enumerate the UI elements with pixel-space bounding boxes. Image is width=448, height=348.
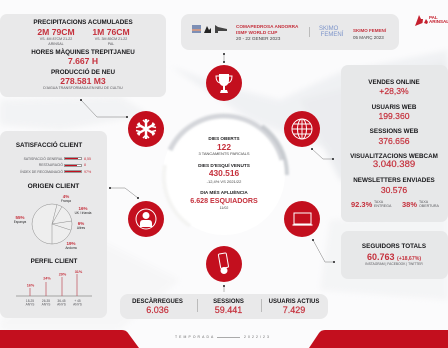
bar chart: perfil: 16% bbox=[27, 283, 35, 287]
label: SATISFACCIÓ GENERAL bbox=[24, 156, 63, 160]
bar chart: perfil: 31% bbox=[75, 270, 83, 274]
event: Skimo Femení bbox=[353, 28, 386, 40]
footer: temporada bbox=[175, 334, 271, 338]
value: 7.429 bbox=[283, 305, 305, 315]
event: Comapedrosa: 20 - 22 GENER 2023 bbox=[236, 36, 280, 40]
legend: Espanya: Espanya bbox=[14, 220, 26, 224]
value: seguidors: 60.763 (+18,67%) bbox=[367, 252, 421, 262]
note: comparació: -12,4% VS 2021/22 bbox=[207, 178, 241, 184]
legend: UK bbox=[74, 206, 92, 215]
icon: laptop bbox=[284, 201, 320, 237]
note: arinsal: ARINSAL bbox=[48, 42, 64, 46]
note: producció: D'AIGUA TRANSFORMADA EN NEU DE CULTIU bbox=[43, 86, 123, 90]
heading: producció: PRODUCCIÓ DE NEU bbox=[51, 69, 115, 76]
icon: snowflake bbox=[128, 111, 164, 147]
heading: precipitacions: PRECIPITACIONS ACUMULADES bbox=[33, 19, 133, 26]
heading: origen: ORIGEN CLIENT bbox=[28, 183, 79, 190]
rate: entrega bbox=[351, 200, 392, 209]
panel: seguidors bbox=[341, 231, 448, 279]
value: 430.516: 430.516 bbox=[209, 168, 239, 178]
icon: phone bbox=[206, 246, 242, 282]
value: 6.036 bbox=[146, 305, 169, 315]
value: producció: 278.581 M3 bbox=[60, 76, 106, 86]
legend: UK: 16% bbox=[78, 206, 88, 211]
icon: trophy bbox=[206, 65, 242, 101]
icon: globe bbox=[284, 111, 320, 147]
legend: Altres bbox=[76, 221, 85, 230]
value: sessions: 376.656 bbox=[378, 136, 410, 146]
logo: Skimo Femení: FEMENÍ bbox=[321, 32, 343, 38]
value: 2M 79CM: 2M 79CM bbox=[37, 27, 75, 37]
value: 8 bbox=[84, 163, 86, 167]
panel: app stats bbox=[120, 294, 328, 319]
note: data: 11/02 bbox=[220, 206, 228, 210]
heading: webcam: VISUALITZACIONS WEBCAM bbox=[350, 153, 438, 160]
central stats bbox=[190, 136, 258, 210]
value: webcam: 3.040.389 bbox=[373, 159, 415, 170]
value: vendes: +28,3% bbox=[379, 86, 409, 96]
legend: França: França bbox=[61, 199, 71, 203]
bar chart: perfil: ANYS bbox=[42, 302, 50, 306]
rate: obertura: TAXA bbox=[419, 200, 428, 204]
value: 122: 122 bbox=[217, 142, 231, 152]
logo: Skimo Femení bbox=[319, 26, 344, 38]
event: Skimo Femení: 05 MARÇ 2023 bbox=[353, 34, 384, 40]
value: newsletters: 30.576 bbox=[381, 185, 407, 195]
panel: events bbox=[181, 14, 399, 50]
logo: Skimo Femení: SKIMO bbox=[319, 26, 338, 32]
icon: person bbox=[128, 201, 164, 237]
note: pal: PAL bbox=[108, 42, 114, 46]
value: 1M 76CM: 1M 76CM bbox=[92, 27, 130, 37]
rate: entrega: ENTREGA bbox=[374, 204, 391, 208]
legend: Andorra bbox=[65, 241, 77, 250]
label: RESTAURACIÓ bbox=[39, 163, 63, 167]
satisfaction rows bbox=[20, 156, 92, 174]
pie chart bbox=[32, 204, 72, 244]
heading: hores màquines: HORES MÀQUINES TREPITJANEU bbox=[31, 49, 135, 56]
value: 8,55 bbox=[84, 156, 91, 160]
heading: DESCÀRREGUES bbox=[132, 299, 183, 305]
footer: right red shape bbox=[309, 330, 448, 348]
legend: França: 4% bbox=[63, 194, 69, 199]
value: usuaris: 199.360 bbox=[378, 111, 410, 121]
event: Comapedrosa: COMAPEDROSA ANDORRA bbox=[236, 24, 298, 28]
heading: vendes: VENDES ONLINE bbox=[368, 79, 420, 86]
event: Skimo Femení: SKIMO FEMENÍ bbox=[353, 28, 386, 32]
note: xarxes: INSTAGRAM | FACEBOOK | TWITTER bbox=[365, 262, 423, 266]
bar chart: perfil: 18-25 bbox=[26, 299, 34, 303]
legend: Andorra: 19% bbox=[66, 241, 76, 246]
bar bbox=[64, 157, 82, 160]
heading: dies d'esquí: DIES D'ESQUÍ VENUTS bbox=[198, 163, 250, 168]
heading: usuaris: USUARIS WEB bbox=[372, 104, 416, 111]
bar bbox=[64, 164, 82, 166]
rate: entrega: 92.3% bbox=[351, 200, 372, 209]
bar bbox=[64, 170, 82, 173]
bar chart: perfil: ANYS bbox=[73, 302, 82, 306]
note: arinsal: VS. 4M 87CM 21-22 bbox=[40, 37, 72, 41]
legend: Espanya bbox=[14, 215, 26, 224]
note: arinsal bbox=[40, 37, 72, 46]
logo: Pal Arinsal bbox=[415, 15, 448, 26]
footer: left red shape bbox=[0, 330, 139, 348]
value: hores: 7.667 H bbox=[68, 56, 98, 66]
legend: Altres: 6% bbox=[78, 221, 84, 226]
legend: Altres: Altres bbox=[77, 226, 85, 230]
label: TEMPORADA bbox=[175, 334, 215, 338]
heading: sessions: SESSIONS WEB bbox=[370, 128, 418, 135]
note: tancaments: 3 TANCAMENTS PARCIALS bbox=[198, 150, 250, 156]
legend: Andorra: Andorra bbox=[65, 246, 77, 250]
label: ÍNDEX DE RECOMANACIÓ bbox=[20, 170, 63, 174]
bar chart: perfil: ANYS bbox=[26, 302, 34, 306]
rate: obertura: OBERTURA bbox=[419, 204, 439, 208]
bar chart: perfil: ANYS bbox=[57, 302, 66, 306]
bar chart: perfil: 29% bbox=[59, 272, 67, 276]
rate: obertura: 38% bbox=[402, 200, 417, 209]
heading: dies oberts: DIES OBERTS bbox=[208, 136, 240, 141]
legend: França bbox=[61, 194, 71, 203]
heading: seguidors: SEGUIDORS TOTALS bbox=[362, 243, 426, 250]
heading: newsletters: NEWSLETTERS ENVIADES bbox=[353, 177, 435, 184]
rate: obertura bbox=[402, 200, 439, 209]
panel: snow stats bbox=[0, 14, 166, 97]
logo: Pal Arinsal: PAL bbox=[429, 15, 438, 20]
event: Comapedrosa bbox=[236, 24, 298, 40]
heading: USUARIS ACTIUS bbox=[269, 299, 319, 305]
legend: Espanya: 55% bbox=[15, 215, 24, 220]
stat: sessions bbox=[213, 298, 244, 315]
value: 59.441 bbox=[215, 305, 242, 315]
heading: satisfacció: SATISFACCIÓ CLIENT bbox=[16, 142, 82, 149]
legend: UK: UK / Irlanda bbox=[75, 211, 91, 215]
sponsor logos bbox=[192, 25, 227, 33]
stat: usuaris actius bbox=[269, 298, 320, 315]
bar chart: perfil: 36-45 bbox=[57, 299, 66, 303]
bar chart: perfil: + 45 bbox=[74, 299, 81, 303]
bar chart: perfil: 24% bbox=[43, 276, 51, 280]
panel: client bbox=[0, 131, 107, 318]
heading: perfil: PERFIL CLIENT bbox=[31, 258, 77, 265]
panel: web stats bbox=[341, 65, 448, 222]
value: esquiadors: 6.628 ESQUIADORS bbox=[190, 197, 258, 205]
note: pal bbox=[94, 37, 128, 46]
heading: SESSIONS bbox=[213, 299, 244, 305]
event: Comapedrosa: ISMF WORLD CUP bbox=[236, 30, 277, 34]
stat: descàrregues bbox=[132, 297, 183, 315]
note: pal: VS. 3M 85CM 21-22 bbox=[95, 37, 127, 41]
heading: dia més afluència: DIA MÉS AFLUÈNCIA bbox=[200, 190, 248, 195]
value: 97% bbox=[84, 170, 91, 174]
bar chart: perfil: 26-35 bbox=[42, 299, 50, 303]
rate: entrega: TAXA bbox=[374, 200, 383, 204]
season: 2022/23 bbox=[244, 334, 271, 338]
bar chart: perfil bbox=[16, 270, 92, 306]
